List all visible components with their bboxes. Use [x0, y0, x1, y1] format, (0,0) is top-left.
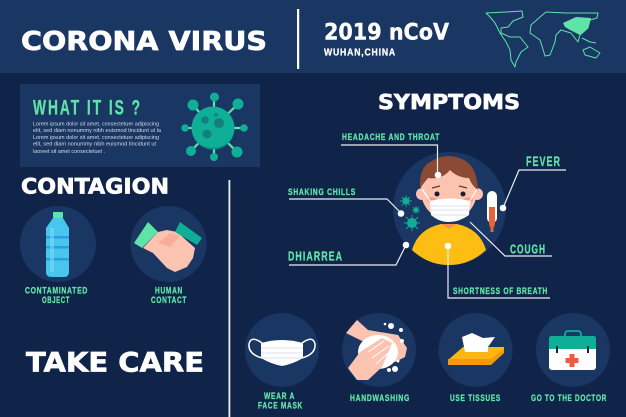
illustration: sick child [412, 156, 486, 265]
icon: world map [486, 11, 600, 67]
callout: shaking chills [288, 187, 404, 217]
icon: tissue box [448, 333, 504, 365]
icon: face mask [249, 339, 315, 366]
icon: small viruses [400, 195, 420, 231]
icon: thermometer [487, 191, 497, 232]
location label: WUHAN,CHINA [324, 46, 396, 58]
heading: symptoms: SYMPTOMS [378, 90, 520, 114]
text block: description: elit, sed diam nonummy nibh euismod tincidunt ut la [33, 128, 161, 134]
callout: dhiarrea [288, 242, 409, 265]
panel: human contact [130, 206, 206, 306]
label: use tissues: USE TISSUES [450, 393, 501, 404]
icon: virus [181, 92, 248, 161]
callout: cough: COUGH [510, 242, 546, 256]
text block: description: Lorem ipsum dolor sit amet, consectetuer adipiscing [33, 135, 159, 141]
subtitle: 2019 nCoV: 2019 nCoV [324, 20, 449, 46]
panel: symptoms diagram [288, 132, 566, 298]
label: contaminated object: OBJECT [42, 295, 70, 306]
text block: description: laoreet sit amet consectetuet . [33, 149, 105, 155]
label: contaminated object: CONTAMINATED [25, 286, 88, 296]
callout: dhiarrea: DHIARREA [288, 248, 343, 264]
label: wear a face mask: WEAR A [264, 391, 295, 402]
label: wear a face mask: FACE MASK [258, 400, 303, 412]
callout: headache and throat: HEADACHE AND THROAT [342, 132, 440, 143]
heading: what it is: WHAT IT IS ? [33, 96, 142, 120]
panel: what it is [20, 84, 260, 167]
panel: doctor [531, 313, 610, 404]
icon: water bottle [46, 212, 69, 277]
label: human contact [151, 286, 187, 306]
callout: shortness of breath [445, 243, 550, 298]
callout: fever [500, 154, 566, 211]
text block: description: Lorem ipsum dolor sit amet, consectetuer adipiscing [33, 122, 159, 128]
label: human contact: HUMAN [155, 286, 183, 296]
panel: contaminated object [20, 206, 96, 306]
title: CORONA VIRUS [21, 27, 267, 57]
text block: description: elit, sed diam nonummy nibh euismod tincidunt ut [33, 142, 157, 148]
label: handwashing: HANDWASHING [350, 393, 410, 404]
divider [228, 180, 230, 417]
callout: shortness of breath: SHORTNESS OF BREATH [453, 286, 548, 297]
header band [0, 0, 626, 73]
icon: washing hands [346, 320, 407, 380]
label: contaminated object [25, 286, 88, 306]
heading: take care: TAKE CARE [26, 348, 204, 378]
heading: contagion: CONTAGION [21, 174, 169, 198]
icon: first aid kit [549, 331, 596, 370]
label: human contact: CONTACT [151, 295, 187, 306]
callout: shaking chills: SHAKING CHILLS [288, 187, 356, 198]
panel: face mask [245, 313, 319, 412]
icon: handshake [134, 222, 202, 272]
icon: China highlight [563, 17, 591, 35]
panel: tissues [438, 313, 512, 404]
callout: fever: FEVER [526, 154, 561, 169]
callout: headache and throat [341, 132, 441, 178]
label: wear a face mask [258, 391, 303, 412]
callout: cough [470, 222, 552, 256]
text block: description [33, 122, 161, 155]
panel: handwashing [342, 313, 416, 404]
